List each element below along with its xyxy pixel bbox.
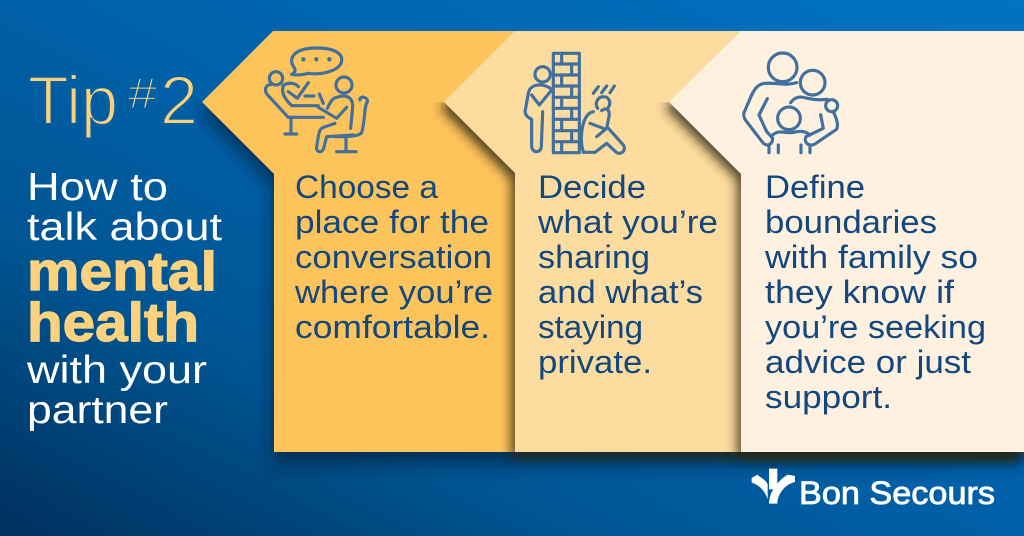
- panel 3 text: you’re seeking: [765, 309, 986, 345]
- tip heading: Tip: [28, 62, 118, 139]
- headline: talk about: [27, 206, 222, 249]
- panel 3 text: support.: [765, 379, 892, 415]
- panel 3: cream arrow: [665, 31, 1024, 458]
- logo: Bon Secours: [752, 469, 995, 511]
- headline: How to: [27, 166, 168, 209]
- headline: partner: [27, 389, 168, 432]
- icon: person and wall: [525, 53, 624, 153]
- panel 2 text: sharing: [538, 239, 650, 275]
- tip heading: #: [128, 69, 158, 118]
- panel 1 text: comfortable.: [295, 309, 490, 345]
- logo mark: [752, 469, 795, 504]
- panel 3 text: advice or just: [765, 344, 971, 380]
- panel 3 text: Define: [765, 169, 865, 205]
- panel 3 text: [764, 169, 986, 415]
- panel 1 text: conversation: [295, 239, 492, 275]
- panel 1 text: [294, 169, 493, 345]
- panel 1 text: where you’re: [294, 274, 493, 310]
- panel 1: yellow arrow: [202, 31, 1024, 463]
- panel 2 text: and what’s: [538, 274, 703, 310]
- headline: mental: [27, 240, 217, 302]
- icon: therapist and patient: [266, 48, 367, 152]
- panel 2: light yellow arrow: [440, 31, 1024, 458]
- icon: family embrace: [744, 53, 838, 153]
- headline: with your: [26, 349, 207, 392]
- panel 2 text: [537, 169, 718, 380]
- tip heading: [28, 62, 198, 139]
- panel 3 text: boundaries: [765, 204, 937, 240]
- panel 2 text: what you’re: [537, 204, 718, 240]
- headline: [26, 166, 222, 432]
- logo wordmark: Bon Secours: [799, 475, 995, 511]
- panel 2 text: staying: [538, 309, 643, 345]
- tip heading: 2: [160, 62, 198, 139]
- panel 2 text: private.: [538, 344, 652, 380]
- panel 3 text: with family so: [764, 239, 978, 275]
- panel 1 text: place for the: [295, 204, 489, 240]
- headline: health: [27, 291, 199, 353]
- panel 2 text: Decide: [538, 169, 646, 205]
- panel 1 text: Choose a: [295, 169, 438, 205]
- panel 3 text: they know if: [765, 274, 954, 310]
